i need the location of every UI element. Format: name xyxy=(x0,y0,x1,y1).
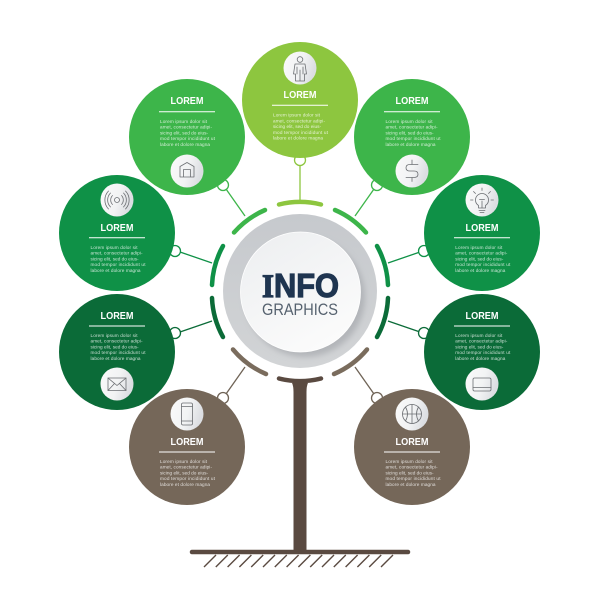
text block: Lorem ipsum dolor sit xyxy=(90,333,138,338)
text block: Lorem ipsum dolor sit xyxy=(90,245,138,250)
connector: lower left xyxy=(170,321,212,338)
icon: signal xyxy=(100,184,134,216)
heading: LOREM xyxy=(170,437,204,448)
text block: sicing elit, sed do eius- xyxy=(386,130,434,135)
panel: lower left xyxy=(59,294,175,410)
text block xyxy=(90,245,146,273)
heading: LOREM xyxy=(284,90,316,101)
hub subtitle: GRAPHICS: GRAPHICS xyxy=(262,301,338,319)
text block: amet, consectetur adipi- xyxy=(90,251,143,256)
panel: bottom right xyxy=(354,389,470,505)
text block: sicing elit, sed do eius- xyxy=(160,130,208,135)
panel: upper right xyxy=(354,79,470,195)
icon: basketball xyxy=(396,398,428,430)
text block: labore et dolore magna xyxy=(455,356,506,361)
text block xyxy=(160,119,216,147)
ground hatching xyxy=(204,555,393,567)
heading: LOREM xyxy=(100,223,134,234)
text block: amet, consectetur adipi- xyxy=(160,465,212,470)
text block xyxy=(90,333,146,361)
text block: sicing elit, sed do eius- xyxy=(273,124,321,129)
panel: lower right xyxy=(424,294,540,410)
icon: phone xyxy=(170,398,204,430)
text block xyxy=(455,333,511,361)
icon: house xyxy=(170,154,204,188)
text block: amet, consectetur adipi- xyxy=(273,118,325,123)
text block: labore et dolore magna xyxy=(273,136,323,141)
icon: laptop xyxy=(466,368,498,400)
text block: amet, consectetur adipi- xyxy=(90,339,143,344)
panel: upper left xyxy=(129,79,245,195)
connector: bottom right xyxy=(355,367,382,404)
text block: mod tempor incididunt ut xyxy=(90,262,146,267)
panel: middle right xyxy=(424,175,540,291)
text block: Lorem ipsum dolor sit xyxy=(386,119,433,124)
text block xyxy=(386,459,441,487)
icon: light bulb xyxy=(466,184,498,216)
center hub xyxy=(223,214,377,368)
connector: bottom left xyxy=(218,367,245,404)
ground line xyxy=(192,550,408,554)
text block xyxy=(386,119,441,147)
text block: labore et dolore magna xyxy=(160,142,210,147)
text block: Lorem ipsum dolor sit xyxy=(455,333,503,338)
text block xyxy=(160,459,216,487)
text block: sicing elit, sed do eius- xyxy=(455,256,504,261)
text block: mod tempor incididunt ut xyxy=(455,350,511,355)
icon: dollar xyxy=(396,154,428,188)
heading: LOREM xyxy=(100,311,134,322)
connector: top xyxy=(294,154,306,203)
text block: labore et dolore magna xyxy=(90,268,141,273)
text block xyxy=(273,112,329,141)
text block: amet, consectetur adipi- xyxy=(455,339,508,344)
text block: amet, consectetur adipi- xyxy=(386,125,438,130)
text block: amet, consectetur adipi- xyxy=(160,125,212,130)
connector: upper right xyxy=(355,180,382,216)
text block: mod tempor incididunt ut xyxy=(455,262,511,267)
icon: person xyxy=(284,52,316,84)
icon: envelope xyxy=(100,368,134,400)
text block: labore et dolore magna xyxy=(386,142,436,147)
text block: Lorem ipsum dolor sit xyxy=(273,112,321,118)
panel: middle left xyxy=(59,175,175,291)
text block: Lorem ipsum dolor sit xyxy=(160,459,208,464)
text block: mod tempor incididunt ut xyxy=(160,136,216,141)
text block: mod tempor incididunt ut xyxy=(386,476,441,481)
text block: labore et dolore magna xyxy=(90,356,141,361)
connector: middle right xyxy=(388,246,430,263)
segmented ring xyxy=(212,202,388,381)
heading: LOREM xyxy=(170,96,204,107)
heading: LOREM xyxy=(396,96,428,107)
heading: LOREM xyxy=(466,223,498,234)
text block: Lorem ipsum dolor sit xyxy=(160,119,208,124)
connector: lower right xyxy=(388,321,430,338)
text block: mod tempor incididunt ut xyxy=(386,136,441,141)
connector: upper left xyxy=(218,180,245,216)
tree trunk xyxy=(292,383,308,552)
hub title: INFO: INFO xyxy=(262,267,339,305)
connector: middle left xyxy=(170,246,212,263)
text block: labore et dolore magna xyxy=(386,482,436,487)
panel: bottom left xyxy=(129,389,245,505)
text block: Lorem ipsum dolor sit xyxy=(455,245,503,250)
text block: mod tempor incididunt ut xyxy=(160,476,216,481)
text block: mod tempor incididunt ut xyxy=(90,350,146,355)
text block: labore et dolore magna xyxy=(160,482,210,487)
text block: amet, consectetur adipi- xyxy=(455,251,508,256)
text block: sicing elit, sed do eius- xyxy=(90,256,139,261)
panel: top xyxy=(242,42,358,158)
text block: mod tempor incididunt ut xyxy=(273,130,329,135)
text block: Lorem ipsum dolor sit xyxy=(386,459,433,464)
text block: sicing elit, sed do eius- xyxy=(386,470,434,475)
heading: LOREM xyxy=(396,437,428,448)
heading: LOREM xyxy=(466,311,498,322)
text block: sicing elit, sed do eius- xyxy=(160,470,208,475)
text block: sicing elit, sed do eius- xyxy=(455,344,504,349)
text block: amet, consectetur adipi- xyxy=(386,465,438,470)
text block xyxy=(455,245,511,273)
text block: sicing elit, sed do eius- xyxy=(90,344,139,349)
text block: labore et dolore magna xyxy=(455,268,506,273)
